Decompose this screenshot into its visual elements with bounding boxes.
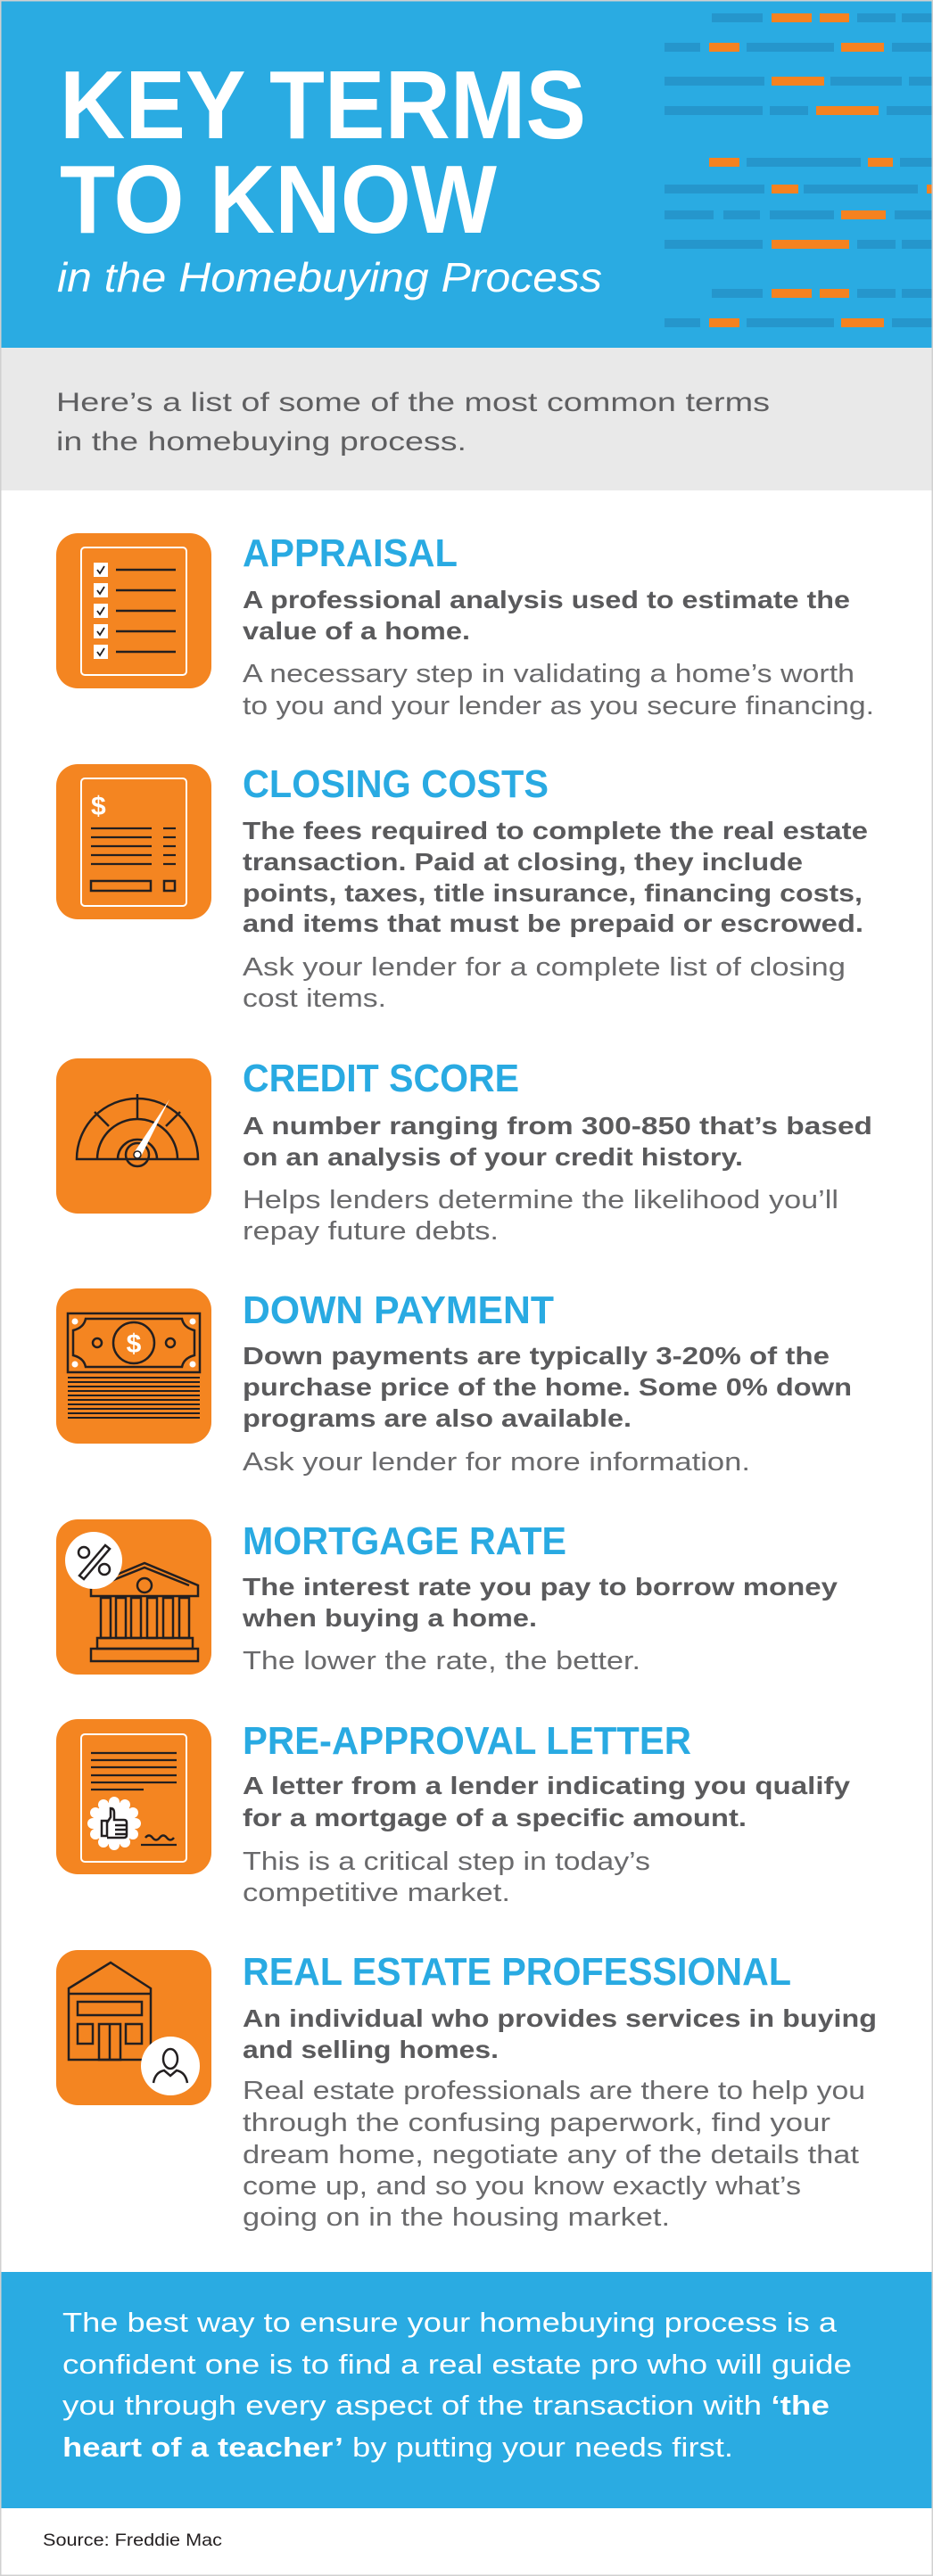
term: mortgage rate: MORTGAGE RATE [243, 1519, 566, 1563]
term: down payment: programs are also available. [243, 1404, 632, 1432]
term: real estate professional: going on in the housing market. [243, 2203, 670, 2232]
term: appraisal [56, 531, 874, 720]
term: appraisal: value of a home. [243, 617, 470, 645]
term: real estate professional: REAL ESTATE PROFESSIONAL [243, 1950, 791, 1994]
term: real estate professional: dream home, negotiate any of the details that [243, 2141, 859, 2169]
term: pre-approval letter: for a mortgage of a specific amount. [243, 1804, 747, 1831]
term: closing costs: transaction. Paid at closing, they include [243, 848, 803, 876]
term: closing costs: cost items. [243, 984, 386, 1013]
term: credit score: repay future debts. [243, 1217, 499, 1246]
term: pre-approval letter: A letter from a lender indicating you qualify [243, 1772, 850, 1799]
term: credit score: A number ranging from 300-850 that’s based [243, 1112, 872, 1140]
term: pre-approval letter: competitive market. [243, 1879, 510, 1907]
term: credit score [56, 1057, 872, 1246]
term: real estate professional: through the confusing paperwork, find your [243, 2109, 830, 2137]
term: mortgage rate: when buying a home. [242, 1604, 537, 1632]
term: pre-approval letter: This is a critical step in today’s [243, 1848, 650, 1876]
term: down payment: DOWN PAYMENT [243, 1288, 554, 1332]
closing callout: confident one is to find a real estate pro who will guide [62, 2349, 852, 2380]
closing callout: heart of a teacher’ by putting your needs first. [62, 2432, 733, 2463]
header band [0, 0, 933, 348]
subtitle: in the Homebuying Process [57, 254, 602, 300]
term: credit score: on an analysis of your credit history. [243, 1143, 743, 1171]
closing callout: you through every aspect of the transaction with ‘the [62, 2390, 830, 2421]
term: down payment: purchase price of the home. Some 0% down [243, 1373, 852, 1401]
icon: gauge [56, 1058, 211, 1214]
closing callout: The best way to ensure your homebuying process is a [62, 2307, 838, 2338]
term: down payment: Down payments are typically 3-20% of the [243, 1342, 830, 1370]
term: mortgage rate: The lower the rate, the better. [243, 1647, 640, 1675]
term: mortgage rate: The interest rate you pay to borrow money [243, 1573, 838, 1601]
term: closing costs: CLOSING COSTS [243, 762, 549, 806]
icon: letter with badge [56, 1719, 211, 1874]
intro band [0, 348, 933, 490]
intro band: Here’s a list of some of the most common terms [56, 388, 770, 417]
term: appraisal: A necessary step in validating a home’s worth [243, 660, 855, 688]
icon: statement: $ [91, 792, 106, 821]
source: Source: Freddie Mac [43, 2531, 222, 2550]
term: closing costs: The fees required to complete the real estate [243, 817, 868, 844]
title: TO KNOW [60, 145, 497, 254]
term: appraisal: APPRAISAL [243, 531, 458, 575]
icon: bank with percent [56, 1519, 211, 1675]
term: appraisal: to you and your lender as you secure financing. [243, 692, 874, 720]
term: appraisal: A professional analysis used to estimate the [243, 586, 850, 613]
icon: cash stack [56, 1288, 211, 1444]
closing callout [0, 2272, 933, 2508]
term: closing costs: and items that must be prepaid or escrowed. [243, 909, 863, 937]
term: mortgage rate [56, 1519, 838, 1675]
term: closing costs: Ask your lender for a complete list of closing [243, 953, 846, 982]
term: real estate professional [56, 1950, 877, 2232]
term: real estate professional: Real estate professionals are there to help you [243, 2077, 865, 2105]
intro band: in the homebuying process. [56, 427, 466, 457]
term: pre-approval letter: PRE-APPROVAL LETTER [243, 1719, 691, 1763]
term: real estate professional: An individual who provides services in buying [243, 2004, 877, 2032]
icon: statement [56, 764, 211, 919]
icon: cash stack: $ [127, 1329, 142, 1359]
term: credit score: Helps lenders determine the likelihood you’ll [243, 1186, 838, 1214]
title [60, 51, 586, 254]
term: down payment [56, 1288, 852, 1477]
icon: checklist [56, 533, 211, 688]
decorative stripes [665, 13, 933, 327]
title: KEY TERMS [60, 51, 586, 160]
term: closing costs [56, 762, 868, 1013]
term: real estate professional: come up, and so you know exactly what’s [243, 2172, 801, 2201]
term: down payment: Ask your lender for more information. [243, 1448, 750, 1477]
icon: house with agent [56, 1950, 211, 2105]
term: credit score: CREDIT SCORE [243, 1057, 519, 1100]
term: closing costs: points, taxes, title insurance, financing costs, [243, 879, 863, 907]
term: pre-approval letter [56, 1719, 850, 1907]
term: real estate professional: and selling homes. [243, 2036, 499, 2063]
